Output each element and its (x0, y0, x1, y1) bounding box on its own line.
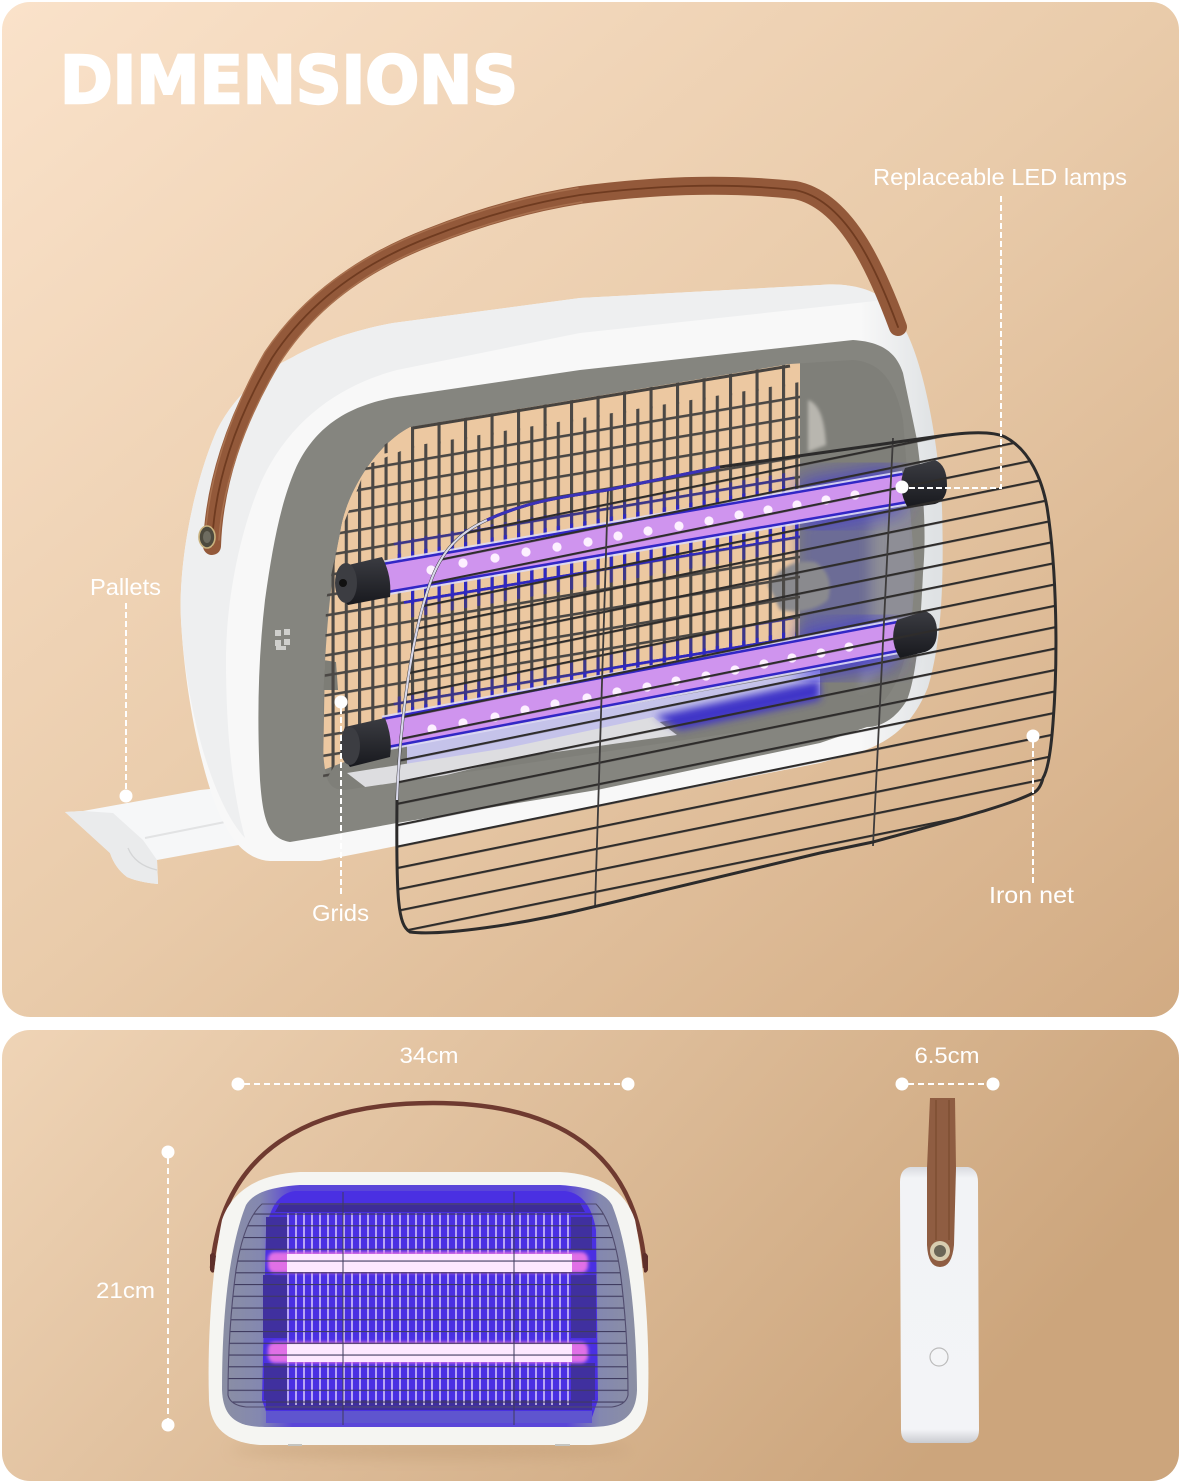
front view grid bars (287, 1213, 571, 1405)
iron net (390, 425, 1070, 940)
front view violet interior (262, 1191, 598, 1423)
UV glow (800, 488, 900, 657)
upper lamp tube (335, 460, 947, 605)
inner electric grid (320, 360, 820, 790)
lower lamp tube (340, 611, 937, 767)
lamp caps (340, 611, 937, 767)
dimension: depth 6.5cm: 6.5cm (914, 1043, 980, 1068)
callout: grids: Grids (312, 900, 369, 926)
front view body (209, 1172, 648, 1445)
rivet (199, 526, 215, 548)
panel: exploded view (2, 2, 1179, 1017)
logo mark (275, 629, 290, 650)
side view body (900, 1167, 979, 1443)
product: side view (900, 1098, 979, 1443)
front view net (228, 1192, 628, 1425)
side view rivet (930, 1241, 950, 1261)
grey inner frame (258, 340, 925, 842)
panel: measurements (2, 1030, 1179, 1481)
front view frame (222, 1185, 637, 1427)
dimension: depth 6.5cm (896, 1043, 1000, 1090)
callout: grids (312, 696, 369, 926)
dimension: height 21cm (96, 1146, 174, 1432)
front view handle (212, 1103, 645, 1268)
callout: iron net (989, 730, 1075, 908)
leather handle (205, 186, 898, 546)
front view lamps (268, 1252, 588, 1363)
shadow (230, 1442, 630, 1458)
side view handle (927, 1098, 956, 1267)
pallet tray (65, 785, 255, 884)
dimension: height 21cm: 21cm (96, 1278, 155, 1303)
callout: pallets (90, 574, 161, 802)
callout: replaceable LED lamps: Replaceable LED lamps (873, 164, 1127, 190)
callout: replaceable LED lamps (873, 164, 1127, 494)
lamp caps (335, 460, 947, 605)
dimension: width 34cm (232, 1043, 634, 1090)
handle tabs (210, 1253, 648, 1273)
callout: pallets: Pallets (90, 574, 161, 600)
device body (181, 284, 943, 861)
product: front view (209, 1103, 648, 1458)
front view feet (288, 1444, 570, 1446)
side view power button (930, 1348, 948, 1366)
title: DIMENSIONS (60, 42, 518, 119)
callout: iron net: Iron net (989, 882, 1075, 908)
dimension: width 34cm: 34cm (400, 1043, 458, 1068)
product: exploded bug zapper (65, 186, 1070, 940)
opening (320, 355, 920, 795)
